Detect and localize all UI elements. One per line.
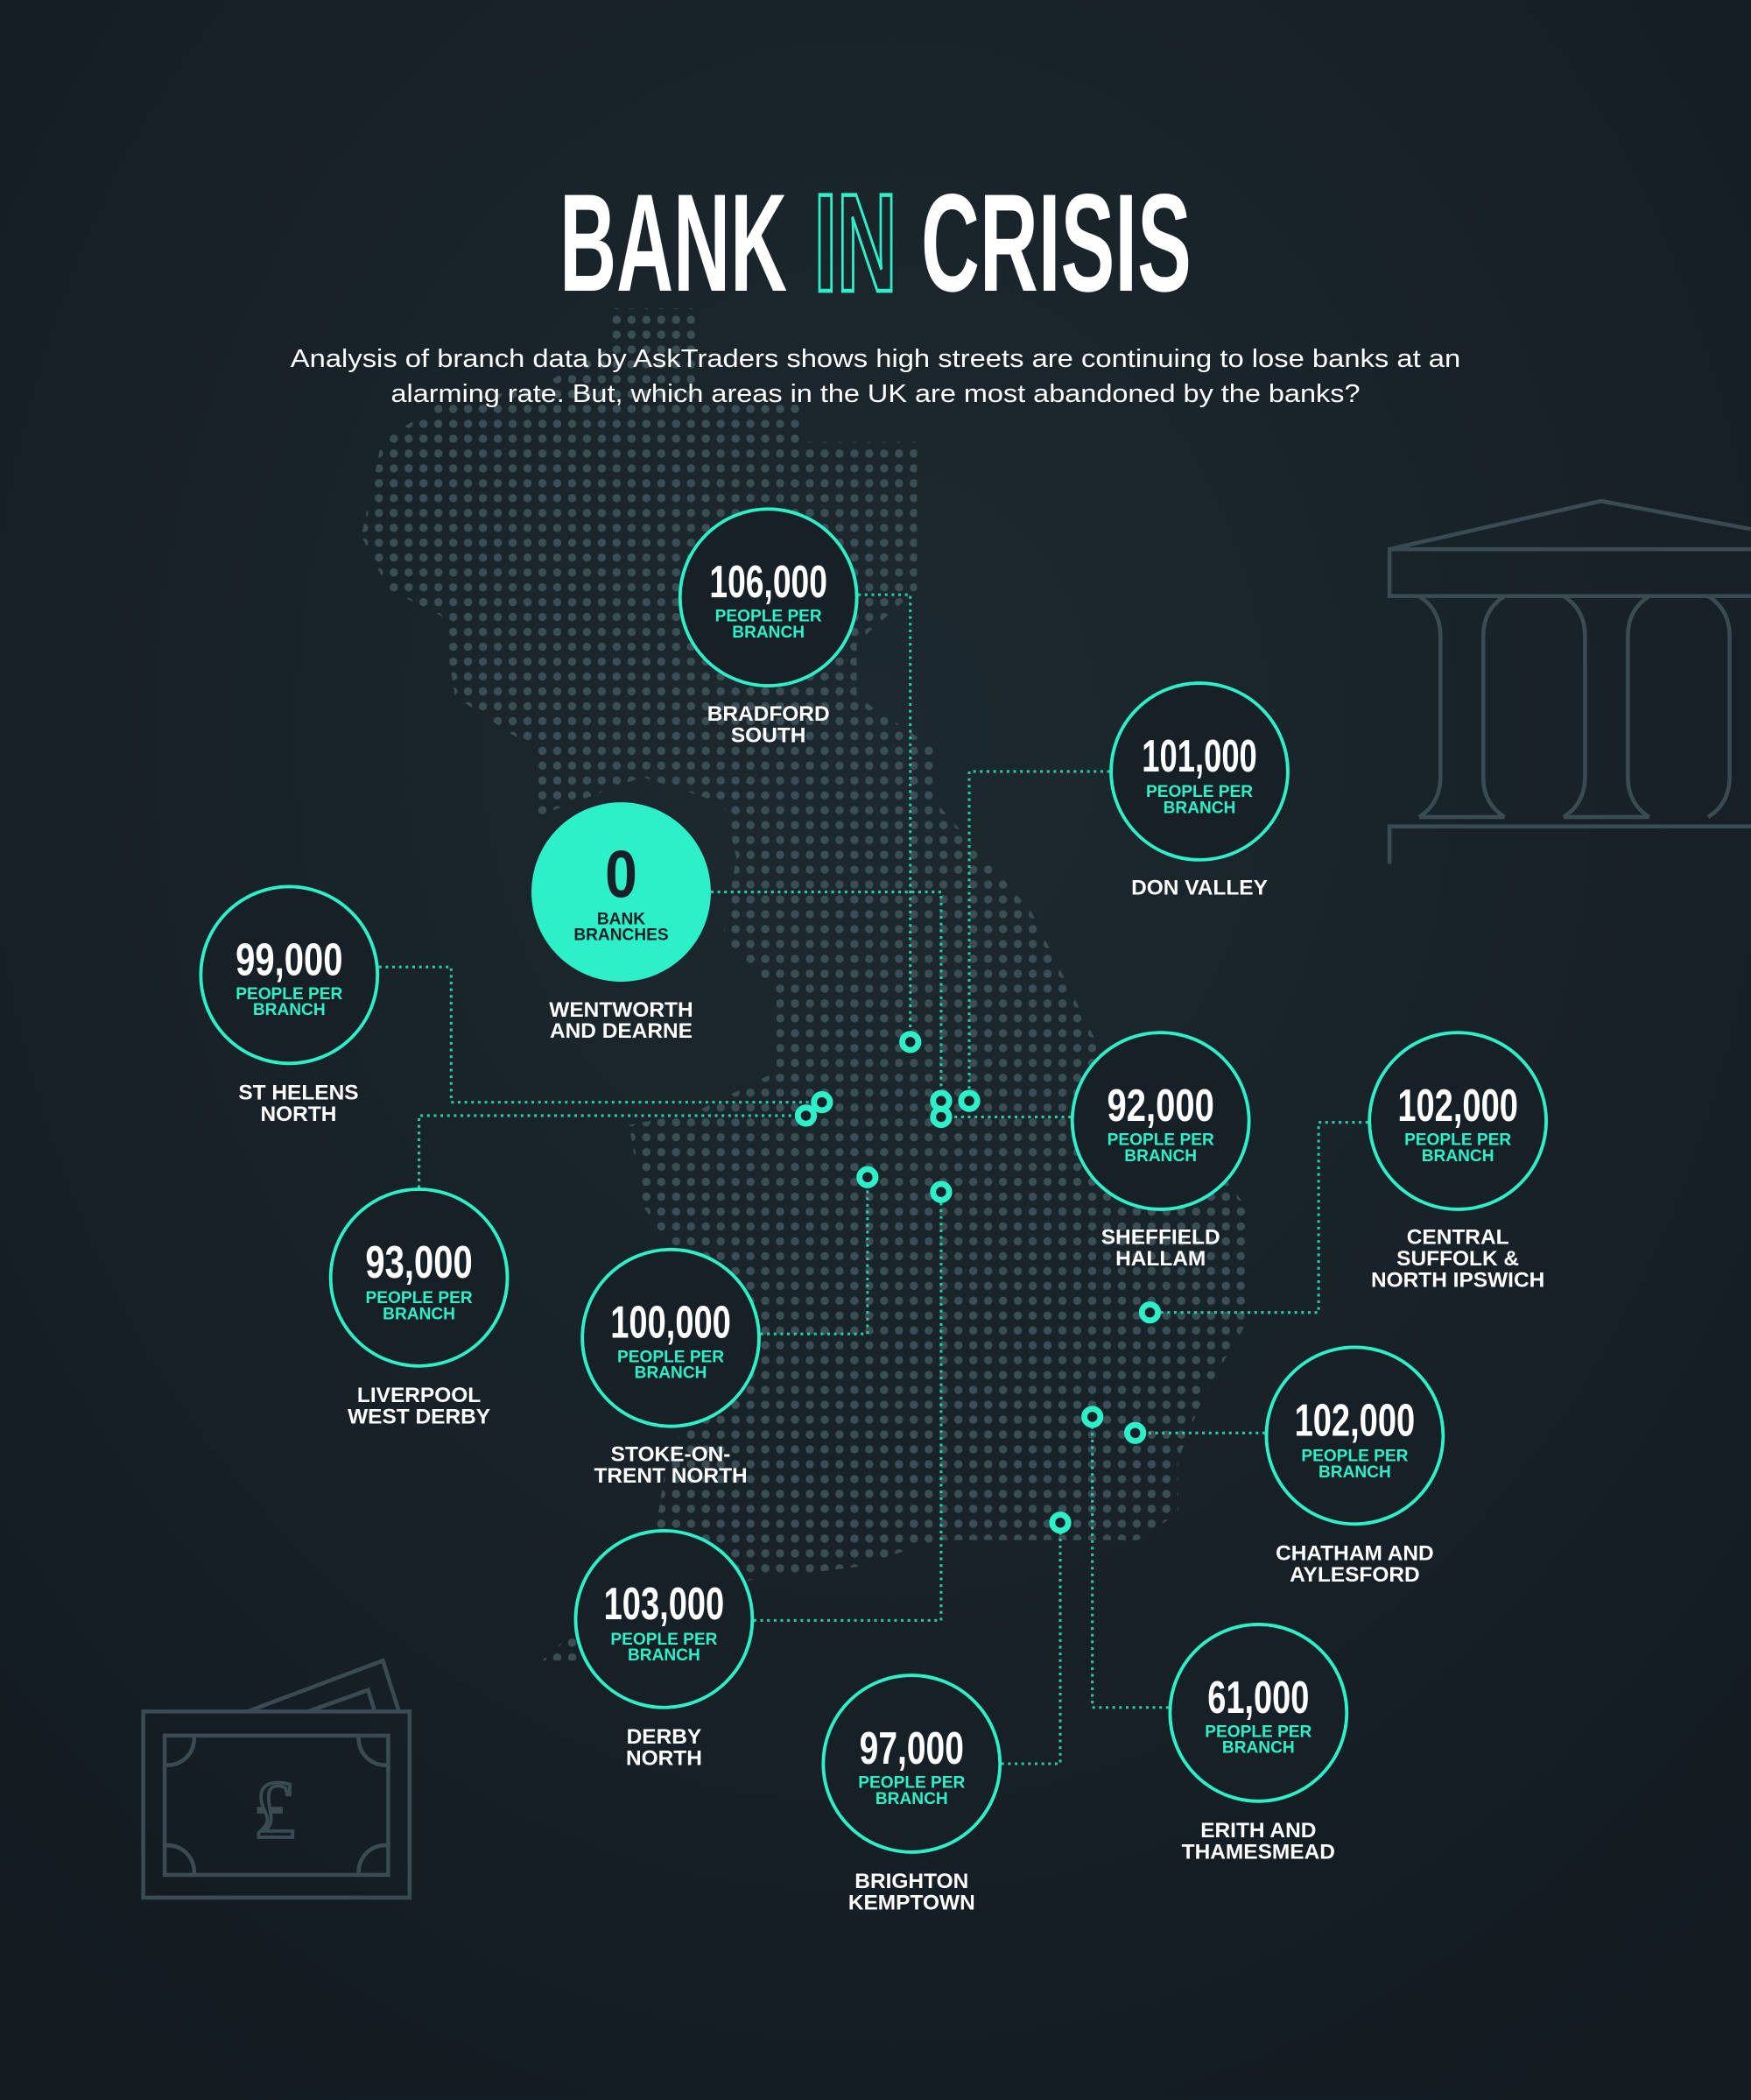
callout: Central Suffolk & North Ipswich [1369,1032,1546,1293]
callout: Don Valley: DON VALLEY [1131,877,1268,900]
callout: Sheffield Hallam: HALLAM [1115,1247,1206,1271]
callout: St Helens North: ST HELENS [238,1082,359,1105]
callout: Liverpool West Derby: BRANCH [383,1305,455,1323]
subtitle [291,345,1460,408]
callout: Brighton Kemptown: PEOPLE PER [858,1774,966,1793]
callout: St Helens North: 99,000 [236,934,342,985]
callout: Chatham and Aylesford: BRANCH [1319,1463,1391,1482]
callout: Bradford South: SOUTH [731,723,805,747]
callout: Brighton Kemptown [823,1675,1000,1915]
subtitle: alarming rate. But, which areas in the UK are most abandoned by the banks? [390,380,1361,408]
callout: Stoke-on-Trent North: 100,000 [610,1298,731,1349]
location markers [798,1034,1158,1531]
callout: Liverpool West Derby: LIVERPOOL [357,1384,481,1407]
callout: Derby North: DERBY [627,1725,701,1749]
callout: Wentworth and Dearne: BRANCHES [573,927,669,945]
callout: Stoke-on-Trent North: PEOPLE PER [617,1348,724,1366]
callout: Derby North: PEOPLE PER [610,1631,718,1649]
callout: Chatham and Aylesford [1266,1347,1443,1587]
callout: Sheffield Hallam: BRANCH [1124,1147,1197,1166]
callout: Brighton Kemptown: 97,000 [860,1723,964,1774]
callout: Don Valley [1111,683,1288,900]
callout: Liverpool West Derby [331,1189,508,1429]
callout: Erith and Thamesmead: PEOPLE PER [1205,1723,1312,1741]
callout: Erith and Thamesmead: 61,000 [1207,1673,1309,1723]
callout: Brighton Kemptown: BRIGHTON [854,1870,968,1893]
callout: Stoke-on-Trent North: TRENT NORTH [594,1464,748,1488]
callout: Don Valley: BRANCH [1164,799,1235,817]
title: CRISIS [921,165,1192,321]
callout: Central Suffolk & North Ipswich: SUFFOLK & [1396,1247,1519,1271]
callout: St Helens North: PEOPLE PER [236,985,343,1004]
callout: Stoke-on-Trent North: STOKE-ON- [611,1442,730,1466]
subtitle: Analysis of branch data by AskTraders shows high streets are continuing to lose banks at an [291,345,1460,373]
callout: Central Suffolk & North Ipswich: 102,000 [1397,1081,1518,1131]
callout: St Helens North [200,886,377,1126]
callout: Wentworth and Dearne [531,802,711,1043]
callout: Derby North [575,1531,752,1771]
callout: Erith and Thamesmead [1170,1624,1347,1864]
callout: Central Suffolk & North Ipswich: PEOPLE PER [1404,1131,1511,1150]
callout: Erith and Thamesmead: THAMESMEAD [1182,1841,1335,1864]
callout: Derby North: 103,000 [604,1579,724,1630]
connector lines [379,595,1368,1764]
callout: Wentworth and Dearne: BANK [597,910,645,928]
callout: Bradford South: BRANCH [732,624,805,642]
callout: Chatham and Aylesford: AYLESFORD [1290,1563,1420,1587]
callout: Wentworth and Dearne: WENTWORTH [549,998,693,1022]
title: BANK [559,165,787,321]
callout: Sheffield Hallam: 92,000 [1108,1081,1214,1131]
callout: Bradford South: BRADFORD [707,702,830,726]
callout: Wentworth and Dearne: 0 [605,838,637,913]
callout: Don Valley: PEOPLE PER [1146,783,1253,801]
callout: St Helens North: NORTH [261,1103,336,1126]
title: IN [814,165,897,321]
callout: Stoke-on-Trent North [582,1250,759,1488]
callout: Brighton Kemptown: BRANCH [876,1790,948,1808]
callout: Erith and Thamesmead: ERITH AND [1200,1819,1316,1843]
callout: Erith and Thamesmead: BRANCH [1222,1739,1295,1758]
callout: Central Suffolk & North Ipswich: NORTH IPSWICH [1371,1269,1544,1293]
callout: Central Suffolk & North Ipswich: CENTRAL [1407,1226,1509,1250]
callout: St Helens North: BRANCH [253,1001,326,1019]
callout: Sheffield Hallam: PEOPLE PER [1108,1131,1214,1150]
callout: Stoke-on-Trent North: BRANCH [635,1364,707,1383]
callout: Sheffield Hallam [1072,1032,1249,1271]
callout: Bradford South [680,509,857,747]
callout: Chatham and Aylesford: 102,000 [1295,1395,1415,1446]
callout: Chatham and Aylesford: PEOPLE PER [1301,1447,1409,1465]
callout: Derby North: NORTH [626,1747,702,1771]
icon: banknote with pound sign: £ [254,1764,295,1856]
callout: Liverpool West Derby: 93,000 [365,1237,473,1288]
callout: Liverpool West Derby: PEOPLE PER [366,1289,473,1307]
callout: Bradford South: PEOPLE PER [715,608,822,626]
callout: Central Suffolk & North Ipswich: BRANCH [1422,1147,1494,1166]
callout: Derby North: BRANCH [628,1646,700,1665]
dotted UK map [348,295,1258,1674]
icon: bank building [1389,501,1751,863]
callout: Brighton Kemptown: KEMPTOWN [848,1892,975,1915]
callout: Don Valley: 101,000 [1142,731,1257,782]
callout: Bradford South: 106,000 [709,557,827,608]
callout: Wentworth and Dearne: AND DEARNE [550,1019,693,1043]
callout: Sheffield Hallam: SHEFFIELD [1101,1226,1220,1250]
icon: banknote with pound sign [144,1660,410,1898]
title [559,165,1192,321]
callout: Liverpool West Derby: WEST DERBY [348,1406,490,1429]
callout: Chatham and Aylesford: CHATHAM AND [1276,1542,1434,1566]
